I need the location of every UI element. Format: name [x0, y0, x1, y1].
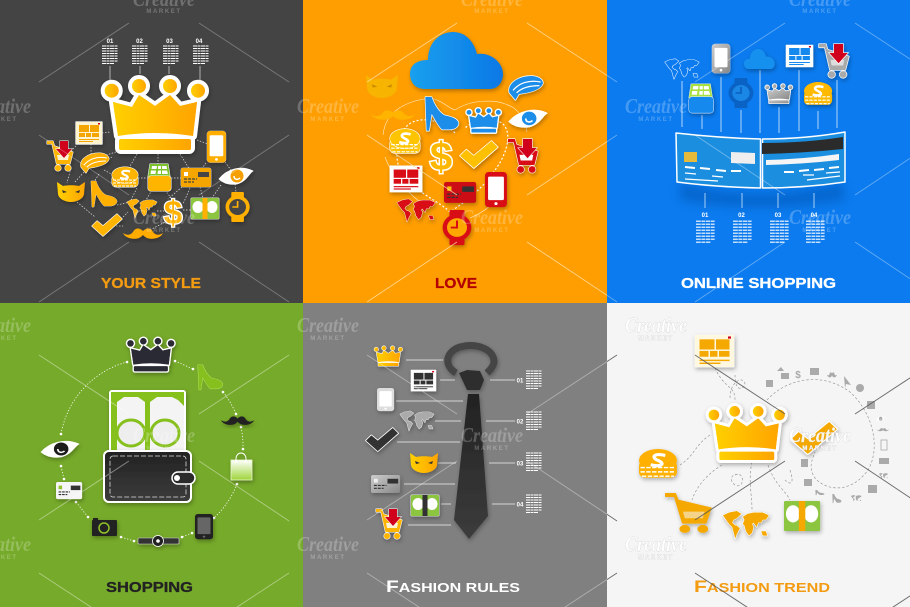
icon: cap	[509, 76, 543, 100]
infographic steps 01-04: 04	[196, 39, 203, 45]
icon: money	[411, 495, 439, 516]
watermark text: MARKET	[638, 336, 674, 342]
icon: credit card	[444, 182, 476, 203]
step labels and text: 03	[517, 462, 524, 468]
icon: world map	[723, 511, 769, 539]
icon: mustache	[123, 228, 163, 239]
icon: camera	[92, 518, 117, 536]
icon: watch	[443, 210, 471, 245]
panel: fashion trend	[607, 303, 910, 607]
credit card illustration	[676, 132, 845, 188]
icon: world map	[397, 199, 435, 222]
panel: shopping	[0, 303, 303, 607]
icon: coins	[804, 82, 832, 105]
icon: web page	[76, 122, 102, 144]
infographic steps 01-04: 03	[775, 213, 782, 219]
infographic steps 01-04: 04	[811, 213, 818, 219]
step labels and text: 04	[517, 502, 524, 508]
icon: dollar: $	[164, 194, 182, 231]
step labels and text: 02	[517, 420, 524, 426]
title: fashion trend: FASHION TREND	[694, 577, 830, 596]
watermark text: Creative	[789, 205, 851, 229]
title: shopping: SHOPPING	[106, 579, 193, 596]
watermark text: MARKET	[146, 446, 182, 452]
icon: dollar: $	[430, 135, 452, 179]
small grey icons	[766, 367, 889, 503]
wallet body	[104, 451, 195, 502]
small grey icons: $	[795, 370, 801, 381]
icon: check	[366, 428, 398, 451]
icon: eye	[509, 110, 547, 127]
banknotes	[110, 391, 185, 461]
icon: phone	[485, 172, 507, 207]
icon: cat faint	[366, 75, 398, 98]
watermark text: MARKET	[310, 117, 346, 123]
watermark text: Creative	[461, 423, 523, 447]
icon: world map	[127, 199, 157, 218]
watermark text: Creative	[625, 532, 687, 556]
icon: cloud	[410, 32, 503, 89]
icon: crown	[374, 346, 402, 366]
icon: phone	[377, 388, 394, 411]
icon: cap	[81, 153, 109, 173]
infographic steps 01-04: 01	[702, 213, 709, 219]
infographic steps 01-04: 03	[166, 39, 173, 45]
dotted ring	[60, 360, 244, 542]
icon: world map	[400, 411, 434, 431]
watermark text: Creative	[133, 205, 195, 229]
icon: web page	[786, 45, 813, 67]
icon: cat	[410, 453, 438, 473]
panel: online shopping	[607, 0, 910, 303]
connector lines: your style	[67, 132, 236, 230]
icon: credit card	[181, 168, 211, 187]
icon: cart	[665, 493, 712, 533]
icon: check	[92, 214, 122, 236]
dashed routes	[680, 368, 874, 510]
icon: web page	[695, 335, 734, 367]
watermark text: MARKET	[310, 336, 346, 342]
credit card shadow	[680, 182, 845, 208]
icon: eye	[41, 441, 79, 457]
icon: card	[371, 475, 400, 493]
icon: watch	[729, 78, 753, 108]
icon: crown	[709, 406, 785, 460]
watermark text: MARKET	[638, 117, 674, 123]
icon: coins	[639, 449, 677, 478]
icon: money	[784, 501, 820, 531]
connector lines	[396, 360, 515, 525]
icon: money	[191, 198, 219, 219]
watermark text: MARKET	[474, 228, 510, 234]
watermark text: Creative	[625, 313, 687, 337]
watermark text: MARKET	[802, 446, 838, 452]
watermark text: Creative	[625, 94, 687, 118]
heart dashed path	[383, 98, 527, 218]
step labels and text	[517, 371, 542, 512]
icon: heel	[425, 97, 459, 131]
watermark text: MARKET	[474, 9, 510, 15]
icon: coins	[112, 167, 138, 187]
watermark text: MARKET	[474, 446, 510, 452]
icon: check	[791, 422, 837, 454]
icon: phone	[207, 131, 226, 162]
watermark text: MARKET	[802, 9, 838, 15]
icon: wallet	[689, 84, 713, 113]
infographic steps 01-04: 02	[738, 213, 745, 219]
icon: heel outline	[198, 365, 223, 390]
title: love: LOVE	[435, 275, 477, 292]
icon: watch horizontal	[138, 536, 179, 546]
watermark text: MARKET	[146, 9, 182, 15]
icon: phone	[712, 44, 730, 73]
panel: fashion rules	[303, 303, 607, 607]
icon: world map outline	[665, 59, 699, 79]
connector arrows up to icons	[682, 70, 837, 133]
icon: shopping bag	[231, 453, 252, 480]
title: online shopping: ONLINE SHOPPING	[681, 275, 836, 292]
icon: cart	[47, 141, 73, 171]
icon: crown	[467, 108, 501, 132]
panel: love	[303, 0, 607, 303]
icon: necktie	[448, 346, 494, 539]
icon: cloud	[744, 49, 775, 69]
watermark text: Creative	[133, 423, 195, 447]
icon: cart	[376, 509, 402, 539]
watermark text: MARKET	[638, 555, 674, 561]
icon: high heel	[91, 181, 117, 207]
icon: watch	[226, 192, 250, 222]
icon: web page	[390, 166, 422, 192]
icon: card	[56, 482, 82, 499]
icon: cart	[819, 44, 849, 78]
icon: big crown	[105, 79, 205, 150]
step labels and text: 01	[517, 378, 524, 384]
title: your style: YOUR STYLE	[101, 275, 201, 292]
icon: money in wallet	[104, 391, 195, 502]
icon: crown	[127, 338, 174, 371]
icon: coins	[390, 129, 420, 153]
watermark text: Creative	[297, 94, 359, 118]
icon: wallet	[148, 164, 171, 191]
icon: check	[460, 141, 498, 168]
watermark text: Creative	[297, 313, 359, 337]
infographic steps 01-04: 01	[107, 39, 114, 45]
icon: crown	[765, 84, 792, 103]
icon: cat	[57, 182, 85, 202]
icon: mustache faint	[371, 110, 415, 120]
watermark text: Creative	[461, 205, 523, 229]
watermark text: Creative	[297, 532, 359, 556]
icon: cart	[508, 139, 538, 173]
watermark text: MARKET	[310, 555, 346, 561]
icon: eye	[219, 168, 253, 184]
icon: mustache	[221, 416, 254, 425]
watermark text: Creative	[789, 423, 851, 447]
icon: web page	[411, 370, 436, 391]
panel: your style	[0, 0, 303, 303]
icon: phone	[195, 514, 213, 539]
infographic steps 01-04: 02	[136, 39, 143, 45]
title: fashion rules: FASHION RULES	[386, 577, 520, 596]
watermark text: MARKET	[802, 228, 838, 234]
infographic steps 01-04	[696, 193, 825, 242]
infographic steps 01-04	[102, 39, 209, 80]
watermark text: MARKET	[146, 228, 182, 234]
